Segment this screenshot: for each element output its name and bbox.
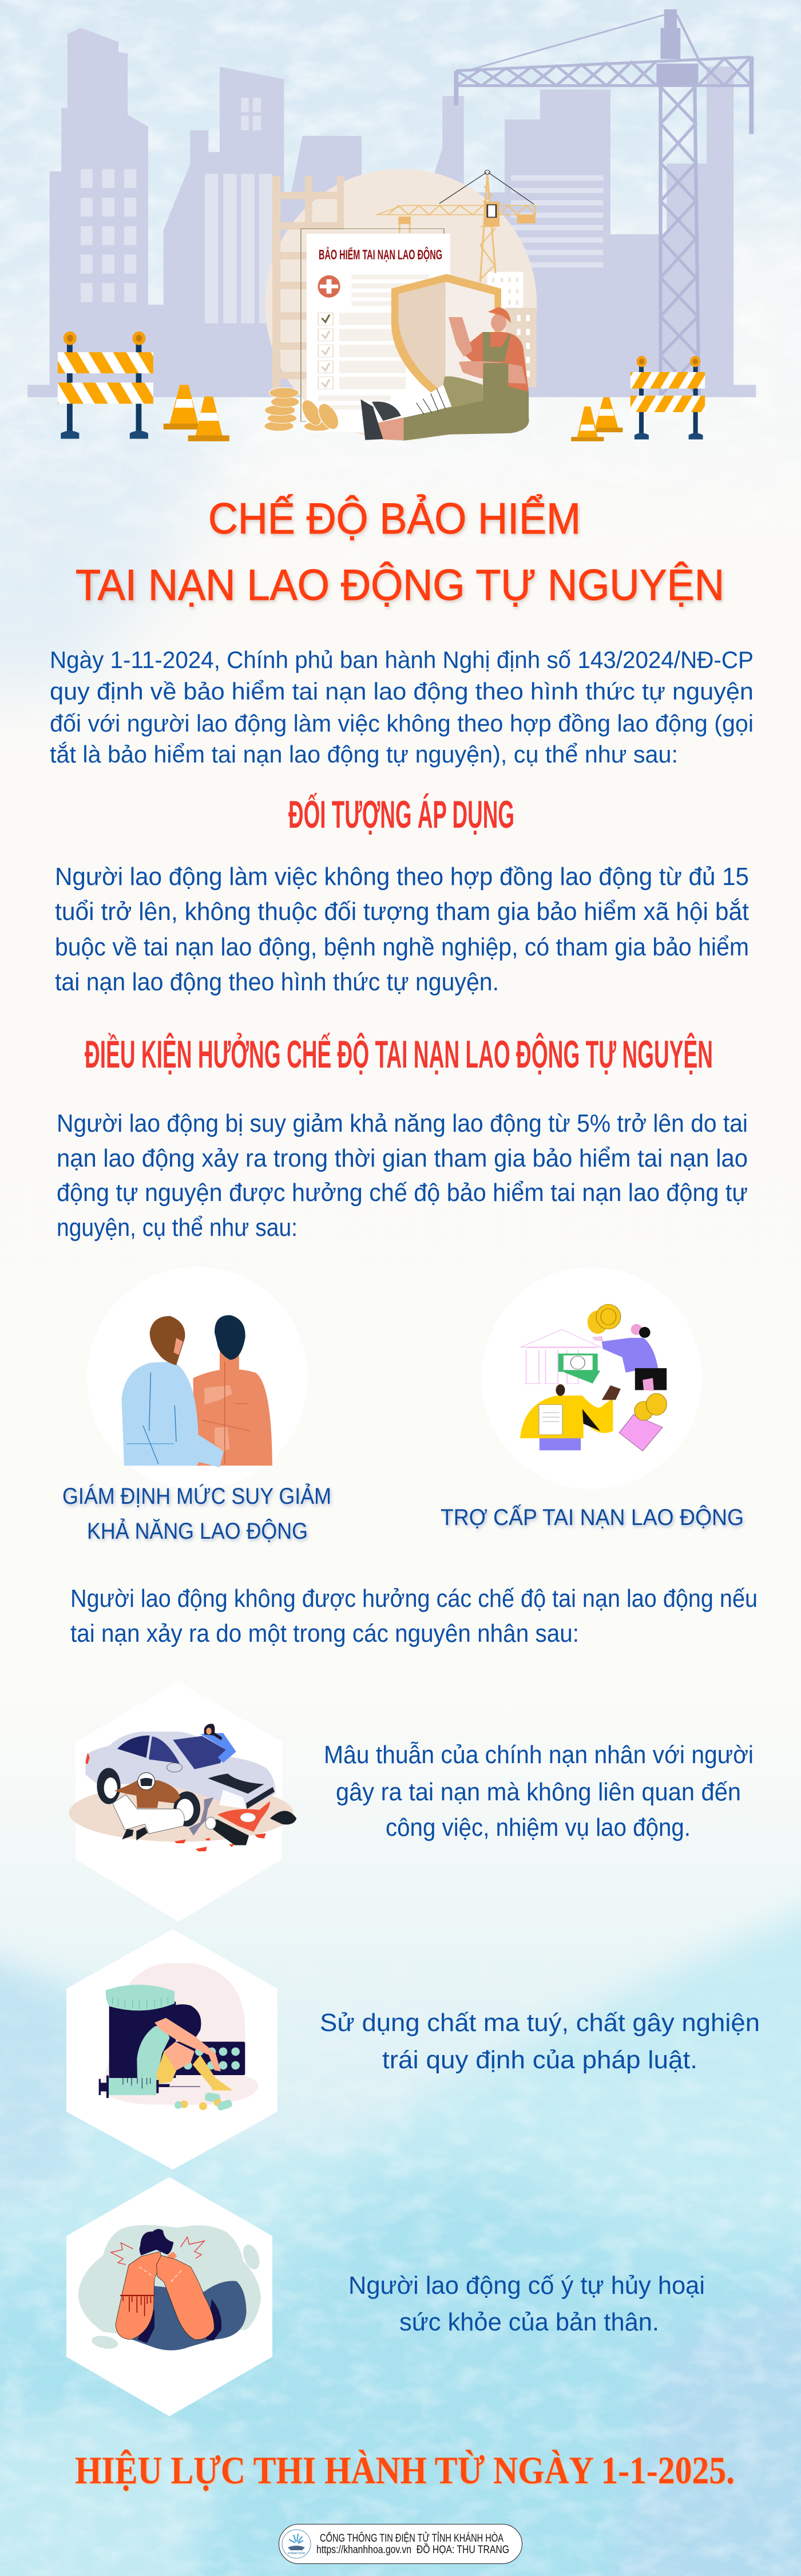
subjects paragraph: tuổi trở lên, không thuộc đối tượng tham gia bảo hiểm xã hội bắt: [55, 898, 749, 926]
exclusion texts: trái quy định của pháp luật.: [382, 2046, 697, 2074]
footer logo: [282, 2530, 311, 2558]
worker: [360, 307, 529, 441]
main title: TAI NẠN LAO ĐỘNG TỰ NGUYỆN: [76, 561, 724, 610]
hexagon: drugs illustration: [66, 1929, 277, 2170]
subjects paragraph: Người lao động làm việc không theo hợp đồng lao động từ đủ 15: [55, 863, 749, 891]
benefit labels: [62, 1483, 744, 1544]
exclusion texts: Sử dụng chất ma tuý, chất gây nghiện: [320, 2009, 760, 2037]
beige oval: [265, 169, 537, 441]
hero illustration: [27, 9, 756, 441]
right barrier: [631, 356, 705, 440]
benefit: allowance illustration: [481, 1267, 702, 1489]
scaffold front: [272, 176, 344, 397]
small crane: [376, 170, 536, 282]
exclusion texts: [320, 1741, 760, 2336]
subjects paragraph: buộc về tai nạn lao động, bệnh nghề nghiệp, có tham gia bảo hiểm: [55, 933, 749, 961]
main title: [76, 494, 724, 610]
insurance document: [301, 229, 450, 432]
exclusion texts: Mâu thuẫn của chính nạn nhân với người: [324, 1741, 754, 1769]
conditions paragraph: Người lao động bị suy giảm khả năng lao động từ 5% trở lên do tai: [57, 1109, 748, 1137]
intro paragraph: [50, 646, 754, 768]
benefit labels: KHẢ NĂNG LAO ĐỘNG: [87, 1518, 308, 1544]
conditions paragraph: [57, 1109, 748, 1242]
exclusion texts: sức khỏe của bản thân.: [399, 2308, 659, 2336]
small buildings: [487, 272, 537, 388]
conditions paragraph: nguyện, cụ thể như sau:: [57, 1214, 298, 1242]
document heading: BẢO HIỂM TAI NẠN LAO ĐỘNG: [319, 246, 442, 263]
hexagon: accident illustration: [69, 1682, 296, 1922]
benefit labels: TRỢ CẤP TAI NẠN LAO ĐỘNG: [441, 1504, 744, 1530]
exclusion texts: Người lao động cố ý tự hủy hoại: [348, 2271, 705, 2300]
subjects paragraph: tai nạn lao động theo hình thức tự nguyện.: [55, 968, 499, 996]
right cones: [571, 397, 622, 441]
intro paragraph: tắt là bảo hiểm tai nạn lao động tự nguyện), cụ thể như sau:: [50, 741, 678, 768]
footer logo: KHÁNH HÒA: [288, 2551, 306, 2555]
heading: applicable subjects: ĐỐI TƯỢNG ÁP DỤNG: [288, 792, 514, 836]
hexagon: self-harm illustration: [66, 2177, 272, 2416]
left barrier: [58, 331, 153, 439]
intro paragraph: quy định về bảo hiểm tai nạn lao động theo hình thức tự nguyện: [50, 678, 754, 705]
conditions paragraph: nạn lao động xảy ra trong thời gian tham gia bảo hiểm tai nạn lao: [57, 1144, 748, 1172]
footer badge: [279, 2524, 522, 2563]
coins: [264, 388, 342, 431]
footer badge: CỔNG THÔNG TIN ĐIỆN TỬ TỈNH KHÁNH HÒA: [320, 2532, 503, 2545]
footer badge: https://khanhhoa.gov.vn ĐỒ HỌA: THU TRANG: [316, 2543, 509, 2556]
tower crane: [456, 9, 751, 396]
conditions paragraph: động tự nguyện được hưởng chế độ bảo hiểm tai nạn lao động tự: [57, 1179, 748, 1207]
exclusions intro: [70, 1585, 758, 1647]
main title: CHẾ ĐỘ BẢO HIỂM: [208, 494, 581, 543]
intro paragraph: Ngày 1-11-2024, Chính phủ ban hành Nghị định số 143/2024/NĐ-CP: [50, 646, 754, 673]
exclusion texts: công việc, nhiệm vụ lao động.: [386, 1814, 691, 1842]
intro paragraph: đối với người lao động làm việc không theo hợp đồng lao động (gọi: [50, 710, 754, 737]
benefit: assessment illustration: [87, 1267, 308, 1490]
left cones: [164, 385, 229, 441]
shield: [391, 274, 501, 404]
city skyline: [27, 28, 756, 397]
exclusion texts: gây ra tai nạn mà không liên quan đến: [336, 1778, 741, 1806]
benefit labels: GIÁM ĐỊNH MỨC SUY GIẢM: [62, 1483, 331, 1509]
subjects paragraph: [55, 863, 749, 996]
scaffold: [272, 176, 344, 397]
exclusions intro: tai nạn xảy ra do một trong các nguyên nhân sau:: [70, 1619, 579, 1647]
